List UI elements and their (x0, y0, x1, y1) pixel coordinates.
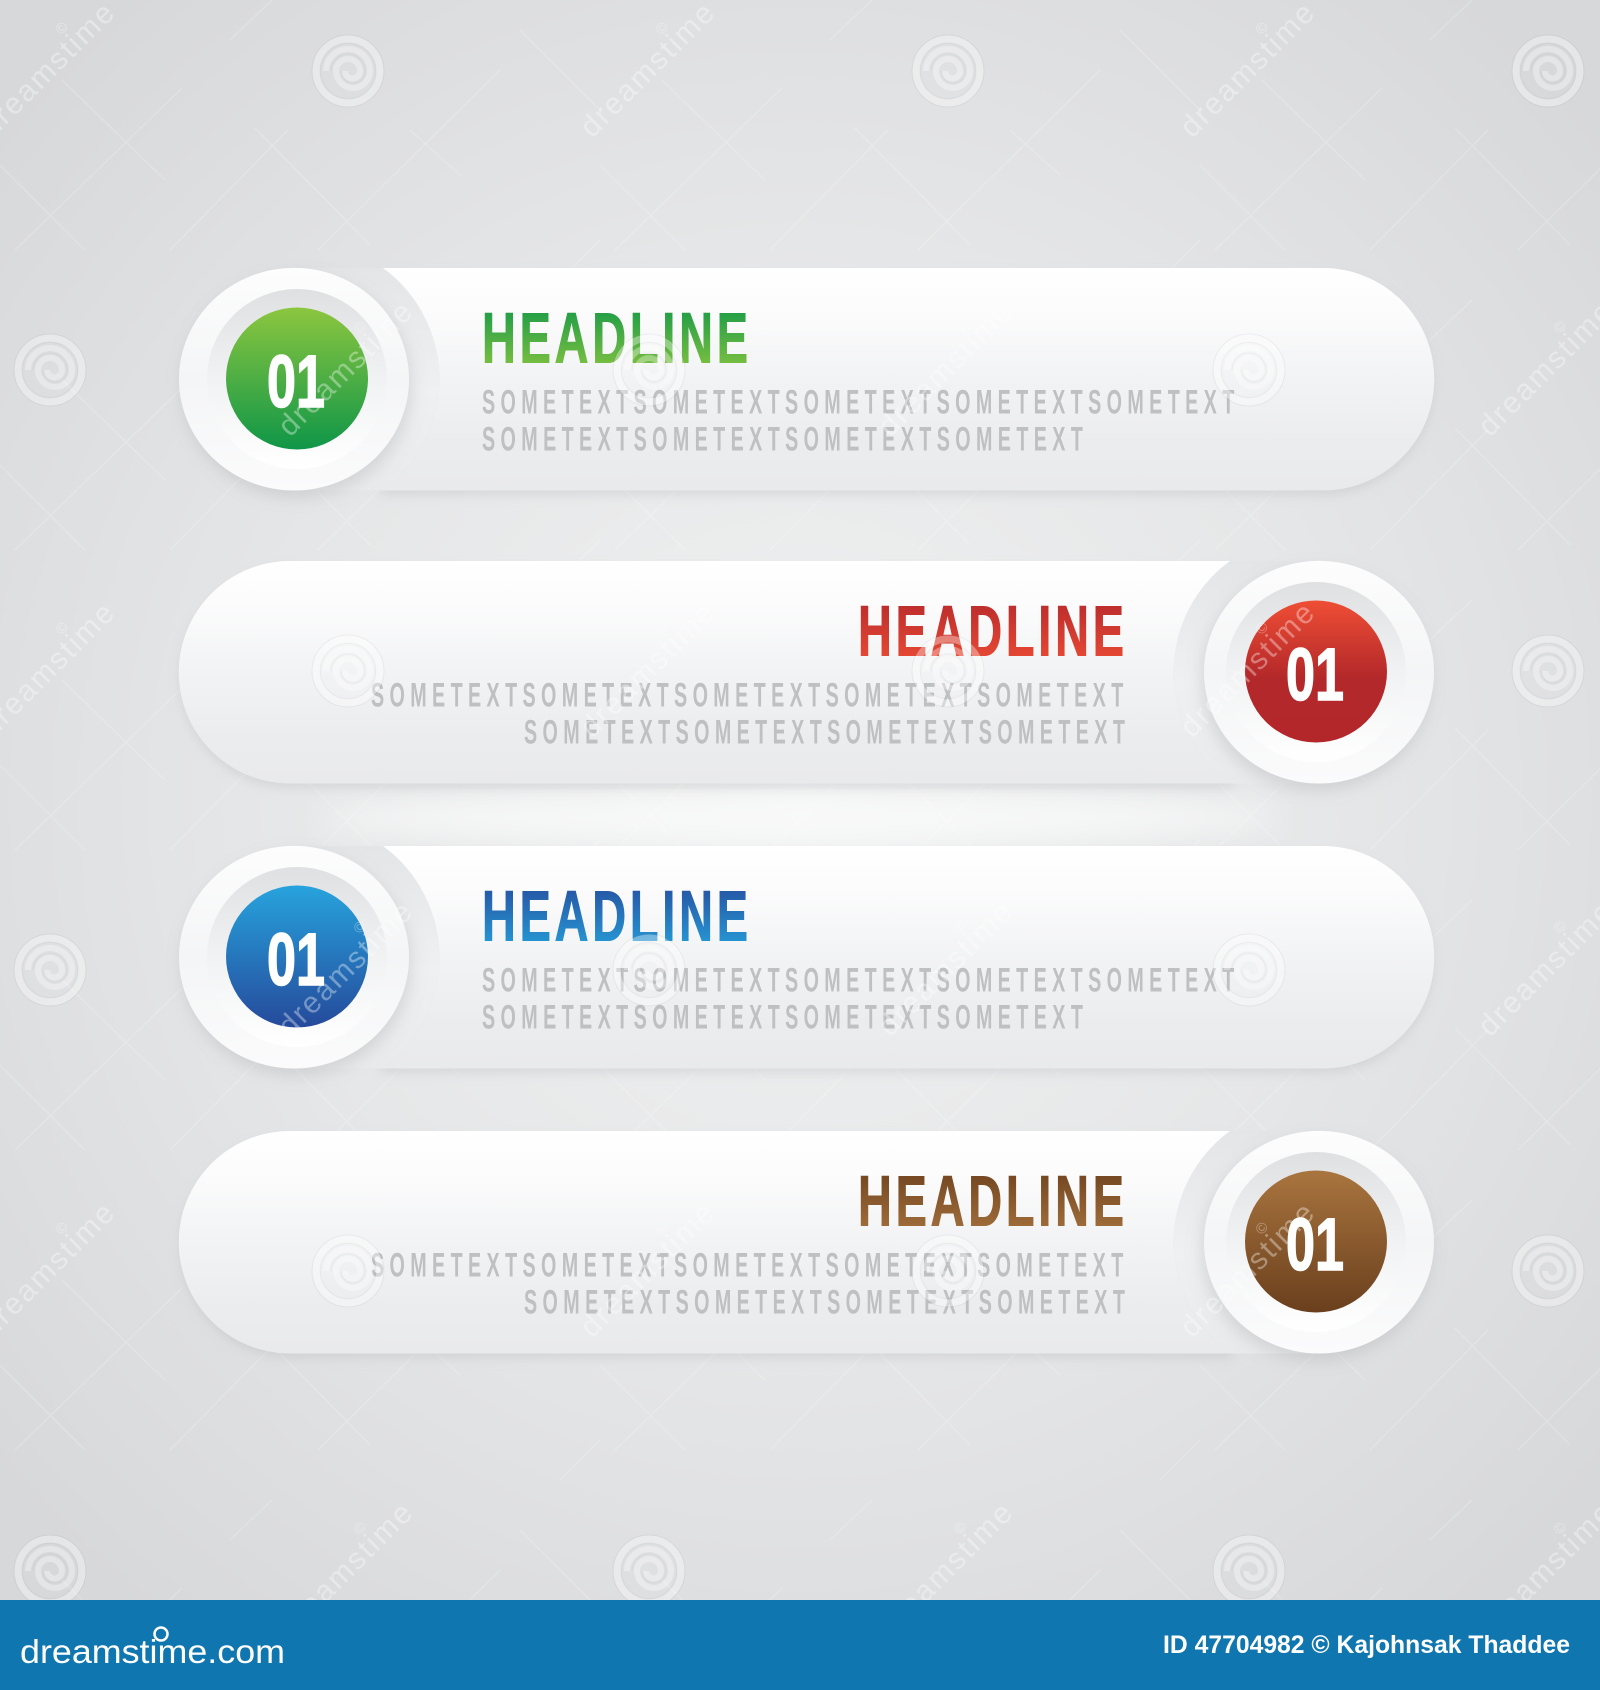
watermark text: © (1550, 918, 1570, 937)
badge 3 (226, 886, 368, 1028)
watermark text: © (350, 918, 370, 937)
panel: banner 1 green (179, 268, 1434, 494)
watermark text: © (1550, 318, 1570, 337)
watermark text: © (52, 19, 72, 38)
watermark text: © (52, 1219, 72, 1238)
watermark text: © (652, 1219, 672, 1238)
watermark text: © (350, 1519, 370, 1538)
watermark text: dreamstime (872, 296, 1019, 443)
footer logo: dreamstime.com (20, 1633, 285, 1670)
panel: banner 4 brown (179, 1131, 1434, 1357)
watermark text: dreamstime (574, 1197, 721, 1344)
watermark text: dreamstime (574, 0, 721, 144)
watermark text: © (950, 918, 970, 937)
watermark text: dreamstime (1174, 1197, 1321, 1344)
badge 4 (1245, 1170, 1387, 1312)
watermark text: © (1252, 1219, 1272, 1238)
watermark text: dreamstime (1174, 597, 1321, 744)
watermark text: © (350, 318, 370, 337)
watermark text: © (652, 19, 672, 38)
body text 2: SOMETEXTSOMETEXTSOMETEXTSOMETEXT (524, 713, 1125, 751)
badge 3: 01 (267, 918, 325, 1001)
watermark text: dreamstime (1174, 0, 1321, 144)
watermark text: dreamstime (574, 597, 721, 744)
body text 3: SOMETEXTSOMETEXTSOMETEXTSOMETEXT (482, 998, 1083, 1036)
footer credit: ID 47704982 © Kajohnsak Thaddee (1163, 1631, 1570, 1659)
headline 4: HEADLINE (858, 1162, 1124, 1241)
headline 1: HEADLINE (482, 299, 748, 378)
body text 1: SOMETEXTSOMETEXTSOMETEXTSOMETEXTSOMETEXT (482, 383, 1234, 421)
body text 3: SOMETEXTSOMETEXTSOMETEXTSOMETEXTSOMETEXT (482, 961, 1234, 999)
watermark text: dreamstime (272, 896, 419, 1043)
panel: banner 3 blue (179, 846, 1434, 1072)
watermark text: © (1550, 1519, 1570, 1538)
watermark text: dreamstime (272, 1497, 419, 1644)
watermark text: dreamstime (272, 296, 419, 443)
body text 1 (482, 383, 1234, 458)
body text 2: SOMETEXTSOMETEXTSOMETEXTSOMETEXTSOMETEXT (371, 676, 1123, 714)
watermark text: © (950, 318, 970, 337)
body text 3 (482, 961, 1234, 1036)
watermark text: dreamstime (872, 1497, 1019, 1644)
badge 2: 01 (1286, 633, 1344, 716)
badge 1: 01 (267, 340, 325, 423)
footer bar (0, 1600, 1600, 1690)
watermark text: dreamstime (872, 896, 1019, 1043)
watermark text: © (950, 1519, 970, 1538)
panel: banner 2 red (179, 561, 1434, 787)
body text 1: SOMETEXTSOMETEXTSOMETEXTSOMETEXT (482, 420, 1083, 458)
watermark text: © (52, 619, 72, 638)
body text 4: SOMETEXTSOMETEXTSOMETEXTSOMETEXTSOMETEXT (371, 1246, 1123, 1284)
body text 2 (371, 676, 1125, 751)
watermark text: © (1252, 19, 1272, 38)
headline 2: HEADLINE (858, 592, 1124, 671)
body text 4: SOMETEXTSOMETEXTSOMETEXTSOMETEXT (524, 1283, 1125, 1321)
body text 4 (371, 1246, 1125, 1321)
badge 1 (226, 308, 368, 450)
badge 4: 01 (1286, 1203, 1344, 1286)
badge 2 (1245, 600, 1387, 742)
watermark text: © (1252, 619, 1272, 638)
headline 3: HEADLINE (482, 877, 748, 956)
watermark text: © (652, 619, 672, 638)
